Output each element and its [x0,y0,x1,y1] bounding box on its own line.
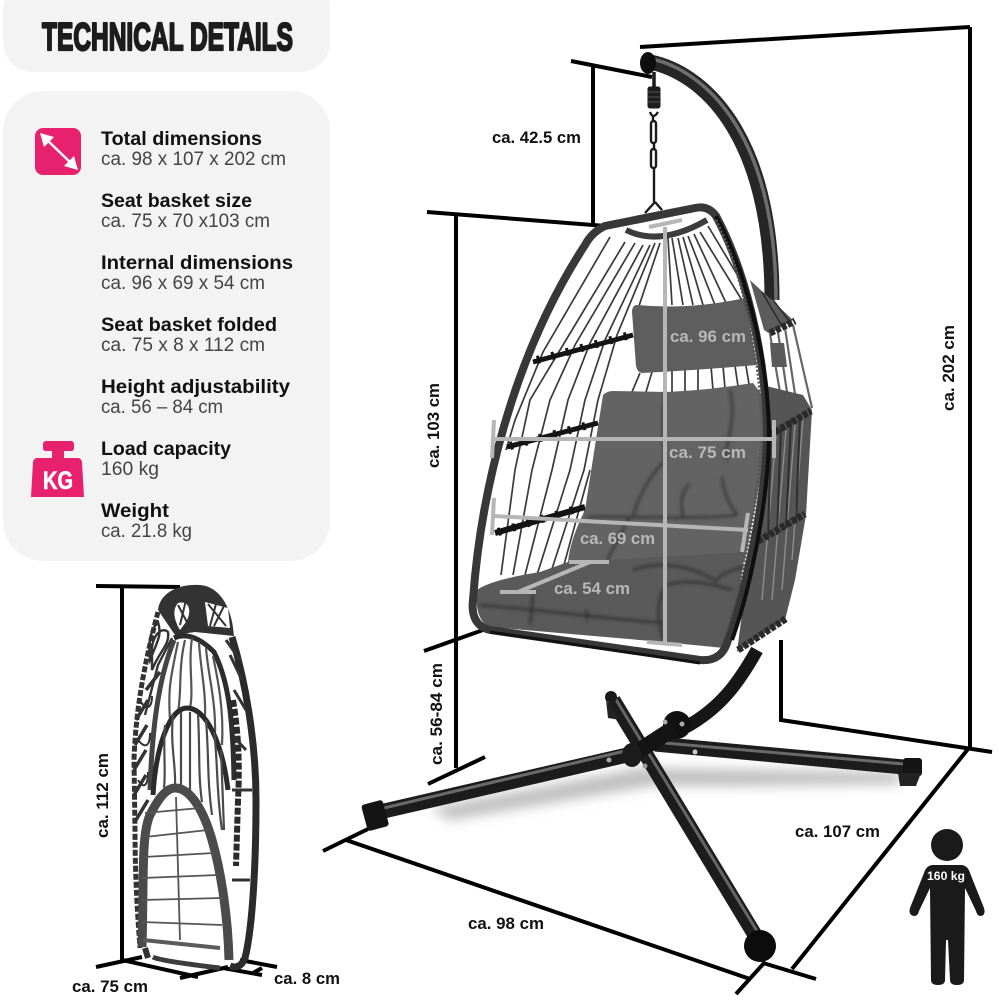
label: 42.5 cm: ca. 42.5 cm [492,128,581,147]
label: 98 cm: ca. 98 cm [468,914,544,933]
label: 69 cm: ca. 69 cm [580,529,655,548]
folded: right rope mesh [233,700,239,866]
label: 112 cm: ca. 112 cm [93,753,112,838]
chair rear wicker side [737,280,812,652]
base: legs [361,691,922,962]
folded: middle arch [153,708,228,795]
title: TECHNICAL DETAILS [42,16,293,59]
chair cross bars [495,335,633,533]
measure lines [492,220,775,645]
spec: load capacity: Load capacity [101,439,231,460]
title panel [3,0,330,72]
folded: rear frame [230,637,256,967]
label: 75 cm: ca. 75 cm [669,443,746,462]
panel: specifications [3,91,330,561]
label: 56-84 cm: ca. 56-84 cm [427,663,446,765]
spec: seat basket folded [101,315,277,356]
folded: head tangle [158,585,234,636]
icon: person 160 kg [910,829,985,985]
folded: front arch [142,788,229,960]
spec: internal dimensions: ca. 96 x 69 x 54 cm [101,273,265,294]
label: 103 cm: ca. 103 cm [424,383,443,468]
seat cushion [477,552,745,648]
spec: load capacity: 160 kg [101,459,159,480]
headrest pillow [632,298,757,373]
icon: person 160 kg: 160 kg [927,869,965,883]
spec: seat basket folded: Seat basket folded [101,315,277,336]
spec: seat basket size [101,191,270,232]
label: 75 cm folded: ca. 75 cm [72,977,148,996]
spec: weight: ca. 21.8 kg [101,521,192,542]
spec: weight: Weight [101,501,170,522]
folded chair [134,585,256,968]
spec: seat basket size: Seat basket size [101,191,252,212]
hanging chain and spring [645,72,662,213]
base shadow [430,768,900,820]
label: 96 cm: ca. 96 cm [670,327,746,346]
label: 107 cm: ca. 107 cm [795,822,880,841]
spec: height adjustability [101,377,290,418]
spec: seat basket folded: ca. 75 x 8 x 112 cm [101,335,265,356]
spec: total dimensions [101,129,286,170]
spec: seat basket size: ca. 75 x 70 x103 cm [101,211,270,232]
stand: curved arm [640,52,776,727]
spec: internal dimensions [101,253,293,294]
label: 8 cm: ca. 8 cm [274,969,340,988]
back cushion [568,383,766,562]
chair spokes [501,226,750,575]
icon: kg weight: KG [43,467,73,495]
dimension lines: hanging chair [323,27,992,994]
chair frame [473,207,769,663]
label: 54 cm: ca. 54 cm [554,579,630,598]
spec: internal dimensions: Internal dimensions [101,253,293,274]
spec: total dimensions: ca. 98 x 107 x 202 cm [101,149,286,170]
spec: height adjustability: ca. 56 – 84 cm [101,397,223,418]
folded: left rope mesh [134,612,174,948]
spec: weight [101,501,192,542]
spec: height adjustability: Height adjustability [101,377,290,398]
spec: total dimensions: Total dimensions [101,129,262,150]
label: 202 cm: ca. 202 cm [939,325,958,411]
spec: load capacity [101,439,231,480]
icon: dimensions arrow [35,128,81,175]
icon: kg weight [31,441,84,497]
folded chair dimension lines [96,586,277,978]
folded: upper arch [174,636,234,780]
